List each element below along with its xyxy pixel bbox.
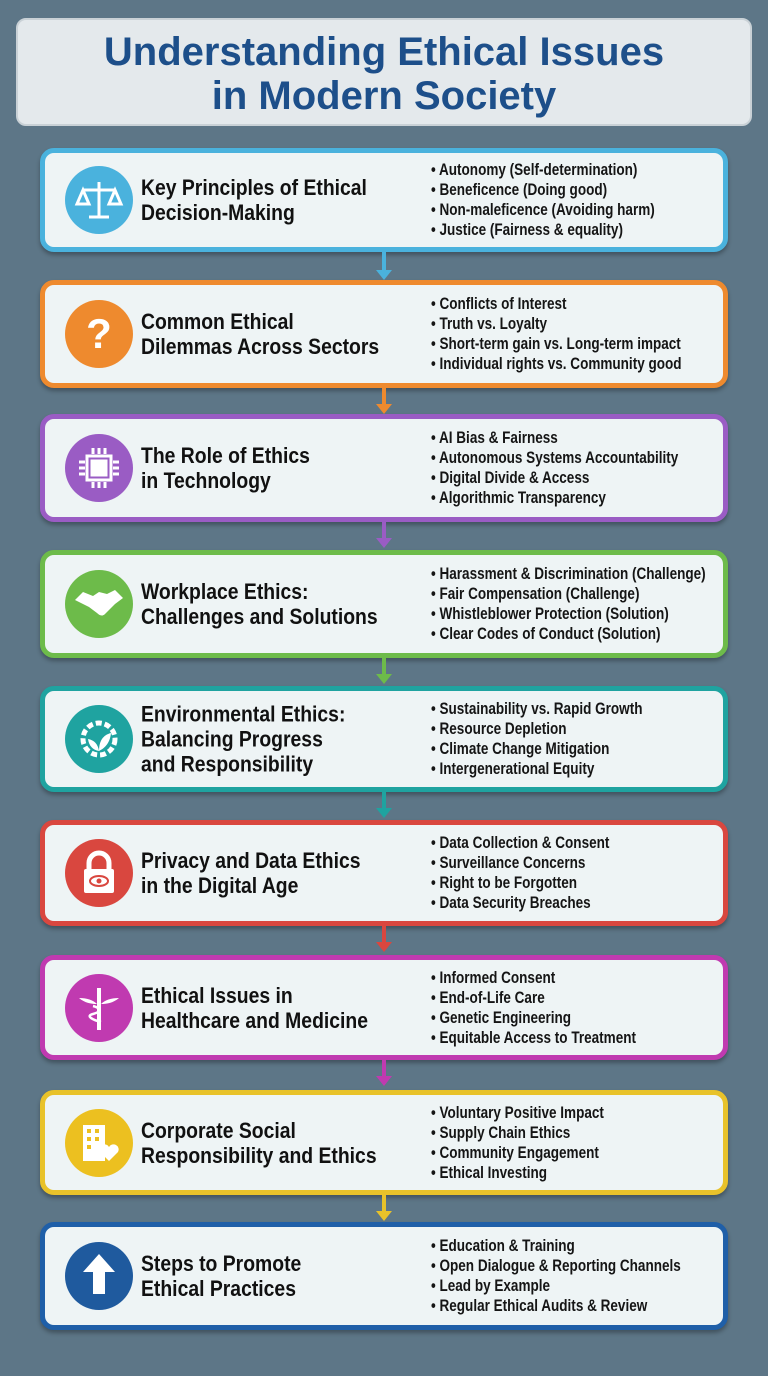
bullet list: • Autonomy (Self-determination) — [431, 161, 637, 179]
heading — [141, 443, 310, 493]
bullet list: • Algorithmic Transparency — [431, 489, 606, 507]
heading: Workplace Ethics: — [141, 579, 308, 604]
bullet list: • Clear Codes of Conduct (Solution) — [431, 625, 660, 643]
heading: Privacy and Data Ethics — [141, 848, 361, 873]
bullet list: • Truth vs. Loyalty — [431, 315, 547, 333]
bullet list: • Informed Consent — [431, 968, 555, 986]
heading: Balancing Progress — [141, 726, 323, 752]
bullet list: • Open Dialogue & Reporting Channels — [431, 1257, 681, 1275]
heading: Responsibility and Ethics — [141, 1142, 377, 1168]
panel: healthcare — [40, 955, 728, 1060]
icon: gear leaf — [65, 705, 133, 773]
bullet list: • Data Collection & Consent — [431, 834, 609, 852]
panel: dilemmas — [40, 280, 728, 388]
icon: building heart — [65, 1108, 133, 1176]
heading — [141, 175, 367, 225]
arrow — [376, 522, 392, 548]
bullet list: • Lead by Example — [431, 1277, 550, 1295]
bullet list — [431, 295, 682, 373]
bullet list — [431, 1104, 604, 1182]
bullet list: • Harassment & Discrimination (Challenge) — [431, 565, 706, 583]
bullet list: • Data Security Breaches — [431, 894, 591, 912]
heading: Environmental Ethics: — [141, 702, 345, 726]
arrow — [376, 658, 392, 684]
bullet list: • Short-term gain vs. Long-term impact — [431, 335, 681, 353]
arrow — [376, 388, 392, 414]
bullet list: • Sustainability vs. Rapid Growth — [431, 700, 642, 718]
bullet list: • Surveillance Concerns — [431, 854, 585, 872]
bullet list — [431, 700, 642, 778]
bullet list — [431, 1237, 681, 1315]
arrow — [376, 1195, 392, 1221]
bullet list: • Digital Divide & Access — [431, 469, 589, 487]
bullet list: • AI Bias & Fairness — [431, 429, 558, 447]
title: in Modern Society — [212, 74, 556, 118]
icon: lock eye — [65, 839, 133, 907]
heading — [141, 702, 345, 776]
heading: Healthcare and Medicine — [141, 1008, 368, 1032]
arrow — [376, 1060, 392, 1086]
heading — [141, 982, 368, 1032]
bullet list — [431, 968, 636, 1046]
heading: Key Principles of Ethical — [141, 175, 367, 200]
heading — [141, 1118, 377, 1168]
bullet list — [431, 161, 655, 239]
bullet list: • Resource Depletion — [431, 720, 567, 738]
bullet list: • Individual rights vs. Community good — [431, 355, 682, 373]
bullet list: • Voluntary Positive Impact — [431, 1104, 604, 1122]
arrow — [376, 792, 392, 818]
bullet list: • Regular Ethical Audits & Review — [431, 1297, 647, 1315]
bullet list — [431, 429, 678, 507]
heading — [141, 848, 361, 898]
bullet list: • Beneficence (Doing good) — [431, 181, 607, 199]
heading: Decision-Making — [141, 200, 295, 225]
panel: steps — [40, 1222, 728, 1330]
bullet list: • Justice (Fairness & equality) — [431, 221, 623, 239]
icon: question — [65, 300, 133, 368]
heading: and Responsibility — [141, 752, 313, 776]
bullet list: • Education & Training — [431, 1237, 575, 1255]
icon: handshake — [65, 570, 133, 638]
bullet list: • Supply Chain Ethics — [431, 1124, 570, 1142]
bullet list: • Conflicts of Interest — [431, 295, 567, 313]
icon: up arrow — [65, 1242, 133, 1310]
bullet list: • Community Engagement — [431, 1144, 599, 1162]
heading: Dilemmas Across Sectors — [141, 334, 379, 359]
heading: in Technology — [141, 468, 271, 493]
heading: Ethical Issues in — [141, 982, 293, 1008]
title: Understanding Ethical Issues — [104, 30, 664, 74]
title — [16, 18, 752, 126]
heading — [141, 579, 378, 629]
icon: caduceus — [65, 974, 133, 1042]
heading: Steps to Promote — [141, 1251, 301, 1276]
panel: CSR — [40, 1090, 728, 1195]
bullet list — [431, 834, 610, 912]
bullet list: • Whistleblower Protection (Solution) — [431, 605, 669, 623]
bullet list: • Non-maleficence (Avoiding harm) — [431, 201, 655, 219]
bullet list: • Equitable Access to Treatment — [431, 1028, 636, 1046]
panel: environmental — [40, 686, 728, 792]
heading: Common Ethical — [141, 309, 294, 334]
icon: chip — [65, 434, 133, 502]
icon: scales — [65, 166, 133, 234]
heading: Corporate Social — [141, 1118, 296, 1142]
bullet list: • Autonomous Systems Accountability — [431, 449, 678, 467]
panel: technology — [40, 414, 728, 522]
bullet list: • Intergenerational Equity — [431, 760, 594, 778]
panel: workplace — [40, 550, 728, 658]
arrow — [376, 252, 392, 280]
heading: Challenges and Solutions — [141, 604, 378, 629]
panel: key principles — [40, 148, 728, 252]
heading: Ethical Practices — [141, 1276, 296, 1301]
bullet list — [431, 565, 706, 643]
bullet list: • Climate Change Mitigation — [431, 740, 609, 758]
bullet list: • Ethical Investing — [431, 1164, 547, 1182]
panel: privacy — [40, 820, 728, 926]
arrow — [376, 926, 392, 952]
heading — [141, 1251, 301, 1301]
bullet list: • End-of-Life Care — [431, 988, 545, 1006]
icon: question: ? — [86, 310, 112, 357]
bullet list: • Right to be Forgotten — [431, 874, 577, 892]
bullet list: • Genetic Engineering — [431, 1008, 571, 1026]
bullet list: • Fair Compensation (Challenge) — [431, 585, 639, 603]
heading — [141, 309, 379, 359]
heading: in the Digital Age — [141, 873, 298, 898]
heading: The Role of Ethics — [141, 443, 310, 468]
